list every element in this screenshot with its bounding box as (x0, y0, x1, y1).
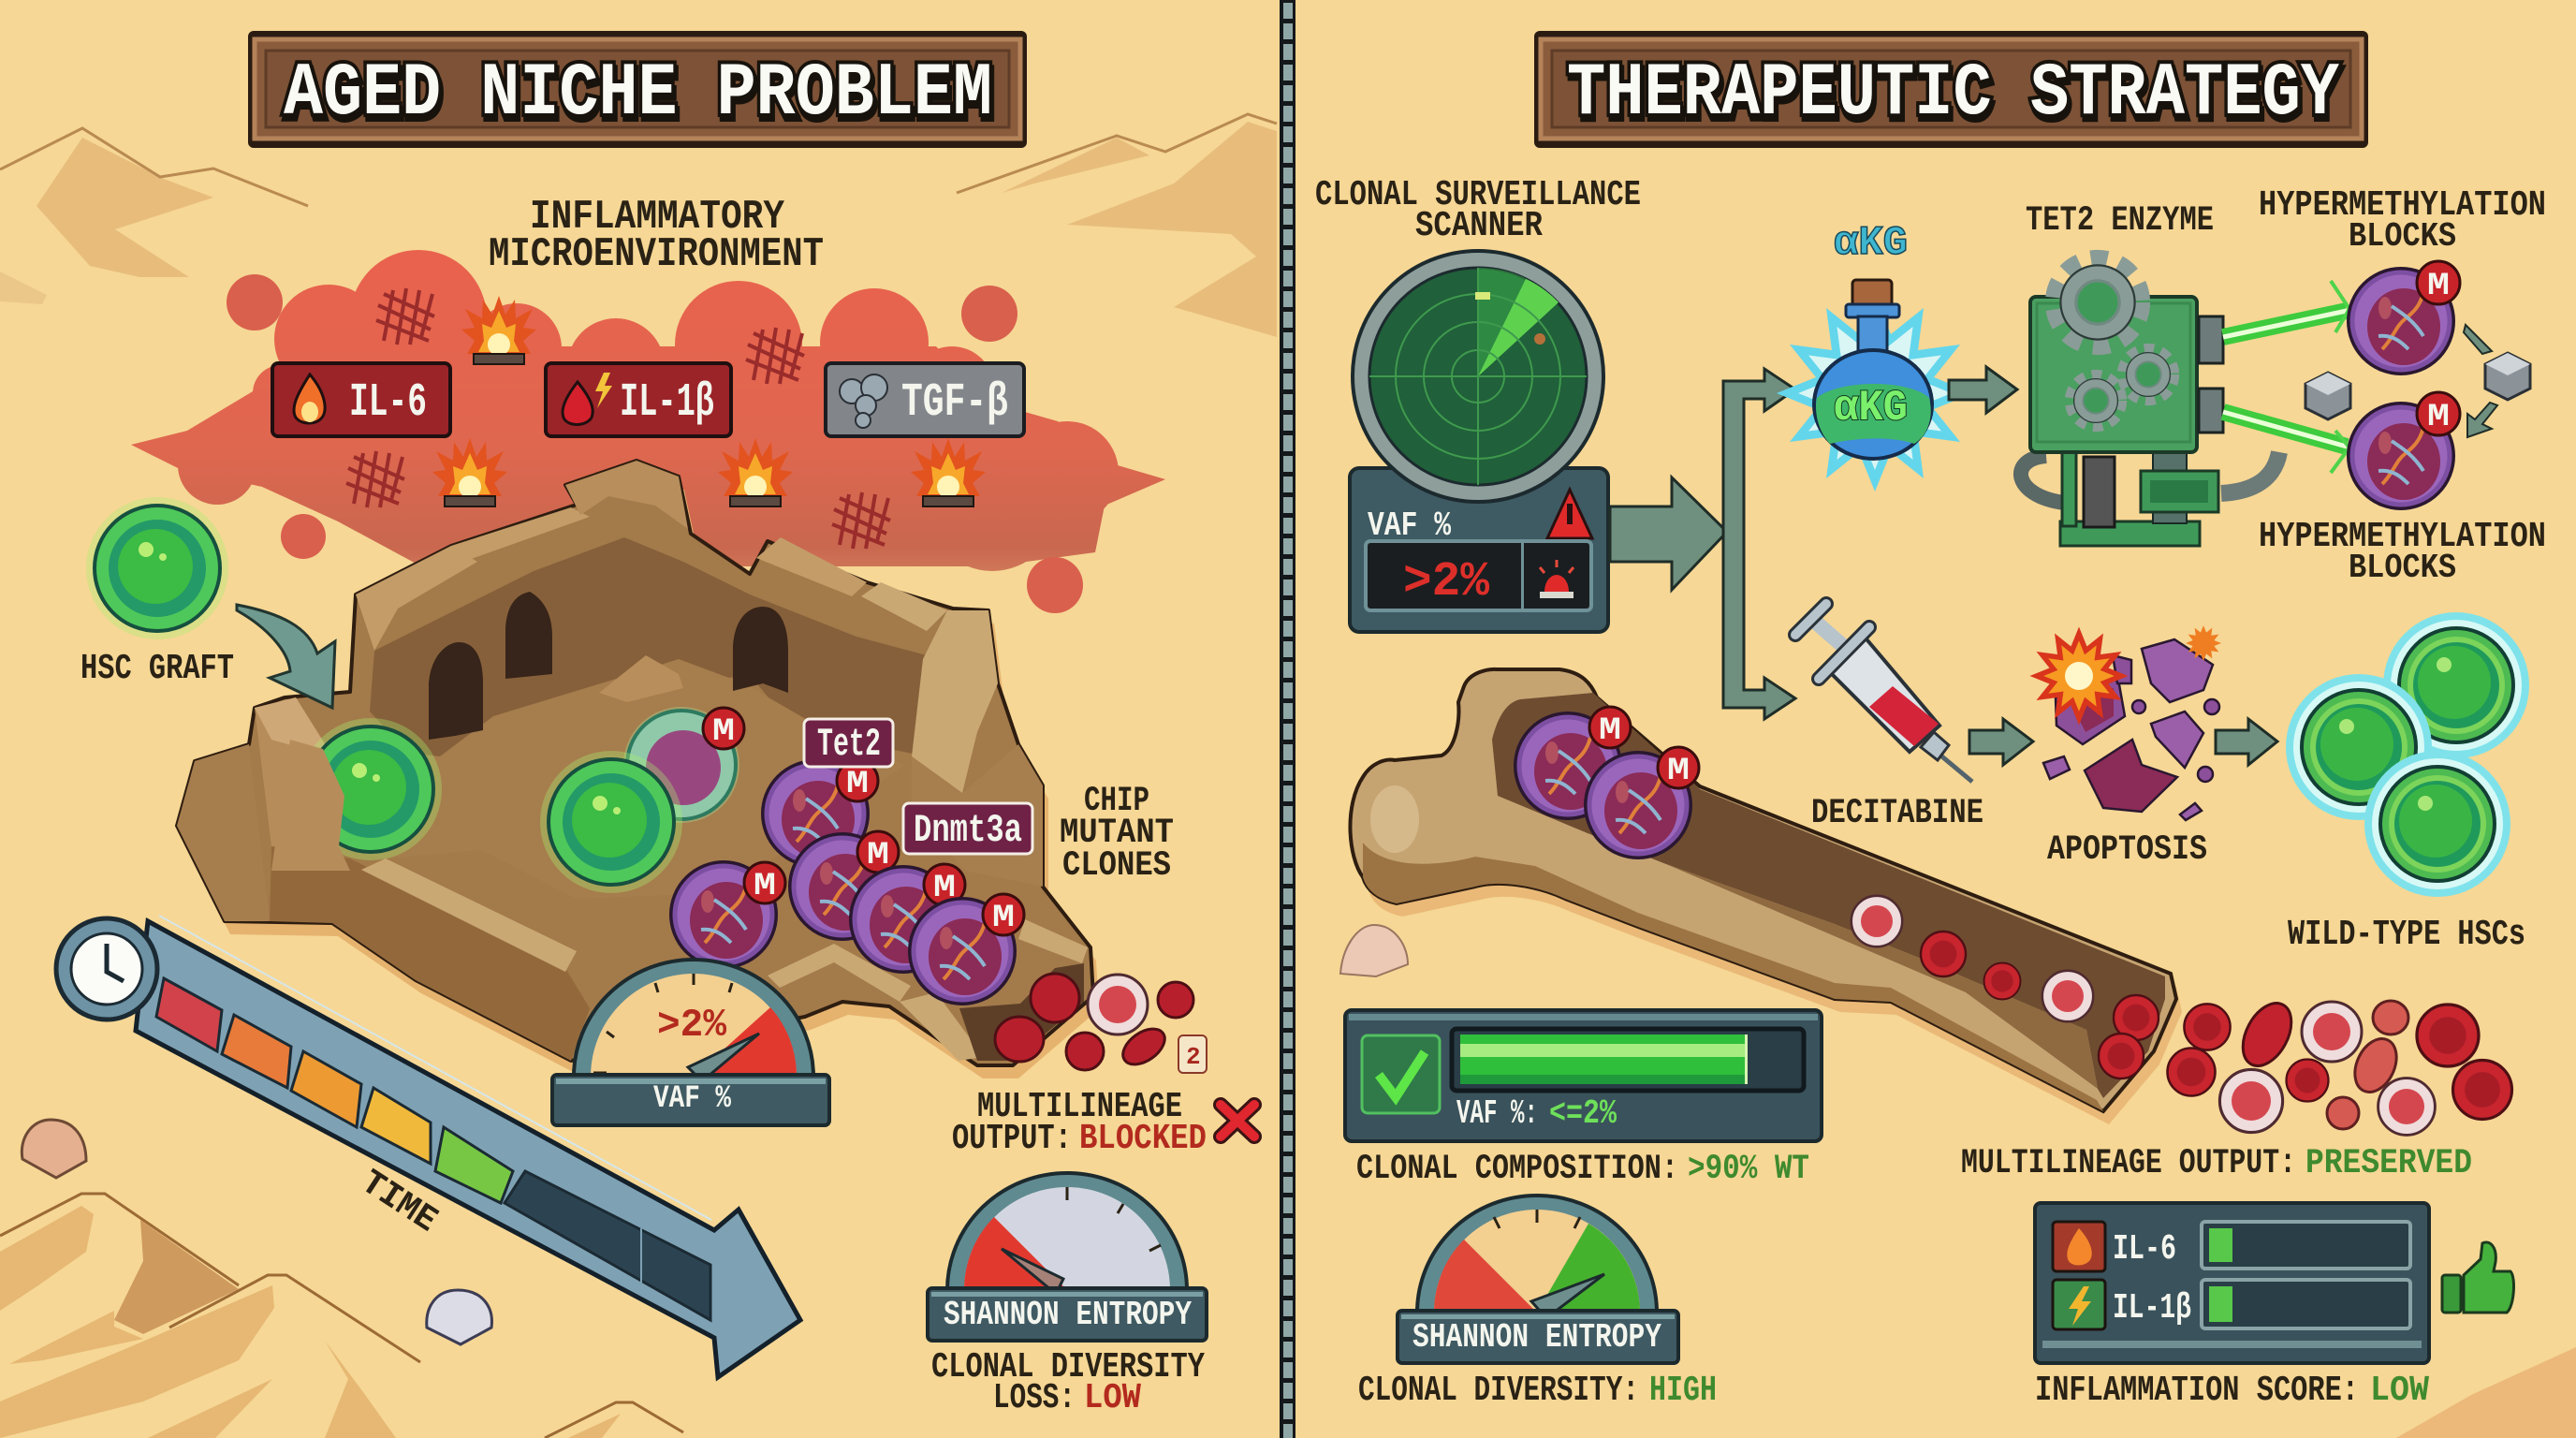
back wall (370, 537, 973, 777)
label: clonal diversity high: CLONAL DIVERSITY: (1358, 1371, 1639, 1411)
VAF gauge: elevated: VAF % (653, 1081, 731, 1117)
VAF readout panel (1350, 468, 1608, 632)
hypermethylated cells: M (2427, 400, 2450, 435)
label: multilineage output preserved: MULTILINEAGE OUTPUT: (1961, 1144, 2296, 1183)
tag: Dnmt3a: Dnmt3a (914, 808, 1022, 853)
label: multilineage output blocked (952, 1087, 1207, 1159)
label: clonal diversity loss low (931, 1347, 1205, 1418)
label: CHIP mutant clones: MUTANT (1060, 814, 1174, 853)
inflammation score panel (2035, 1203, 2429, 1363)
tag: Tet2 (804, 719, 893, 767)
time progression arrow (56, 916, 800, 1377)
label: clonal surveillance scanner: SCANNER (1415, 206, 1543, 246)
hypermethylated cells (2349, 261, 2460, 508)
mutant cells in marrow: M (1667, 754, 1690, 789)
label: clonal composition: CLONAL COMPOSITION: (1356, 1150, 1678, 1189)
shell (1340, 925, 1408, 976)
label: hypermethylation blocks lower: BLOCKS (2349, 549, 2456, 587)
label: multilineage output blocked: BLOCKED (1079, 1119, 1207, 1159)
radar scanner (1353, 251, 1603, 502)
VAF status bar panel: <=2% (1549, 1094, 1617, 1133)
label: CHIP mutant clones: CLONES (1062, 846, 1171, 886)
inflammation score panel: IL-1β (2113, 1288, 2191, 1328)
label: inflammation score low: INFLAMMATION SCORE: (2035, 1371, 2359, 1411)
CHIP mutant clones: M (992, 901, 1015, 936)
engrafted cell with mutation (623, 707, 744, 823)
Shannon entropy gauge: high (1398, 1196, 1678, 1363)
cytokine label: IL-1β: IL-1β (620, 376, 714, 430)
label: clonal surveillance scanner (1315, 175, 1641, 246)
label: CHIP mutant clones: CHIP (1084, 782, 1149, 821)
VAF status bar panel (1345, 1010, 1822, 1141)
arrow: apoptosis to wild-type cells (2216, 719, 2277, 765)
Shannon entropy gauge: low: SHANNON ENTROPY (944, 1296, 1192, 1334)
branching pipe arrows (1723, 369, 1795, 719)
label: clonal diversity high: HIGH (1649, 1371, 1717, 1411)
title banner: therapeutic strategy (1534, 31, 2368, 148)
bone marrow bone (1350, 669, 2182, 1124)
label: clonal diversity loss low: LOSS: (993, 1378, 1076, 1418)
icon: HSC graft cell (86, 497, 228, 639)
title banner: therapeutic strategy: THERAPEUTIC STRATEGY (1567, 51, 2339, 137)
label: clonal composition: >90% WT (1688, 1150, 1809, 1189)
center divider (1280, 0, 1295, 1438)
panel: aged niche problem (22, 31, 1254, 1418)
heading: inflammatory microenvironment: INFLAMMATORY (530, 194, 785, 241)
explosion (2029, 625, 2221, 725)
cytokine label: TGF-β (826, 363, 1024, 436)
preserved blood cell output (2168, 995, 2512, 1135)
Shannon entropy gauge: low (928, 1173, 1207, 1341)
label: clonal surveillance scanner: CLONAL SURVEILLANCE (1315, 175, 1641, 215)
CHIP mutant clones: M (754, 869, 776, 904)
label: clonal diversity loss low: LOW (1084, 1378, 1141, 1418)
label: multilineage output blocked: MULTILINEAGE (977, 1087, 1182, 1127)
inflammatory cloud (131, 250, 1165, 613)
tag: Tet2: Tet2 (817, 722, 881, 767)
icon: blocked cross (1221, 1105, 1254, 1137)
cytokine label: IL-1β (546, 363, 731, 436)
engrafted cell with mutation: M (712, 714, 735, 750)
blood cells in marrow (1852, 896, 2159, 1078)
heading: inflammatory microenvironment (489, 194, 824, 278)
label: multilineage output blocked: OUTPUT: (952, 1119, 1072, 1159)
TET2 enzyme machine (2021, 261, 2279, 546)
blocked blood cells (995, 974, 1207, 1073)
label: hypermethylation blocks lower (2259, 517, 2546, 587)
label: hypermethylation blocks upper: BLOCKS (2349, 217, 2456, 256)
CHIP mutant clones: M (867, 838, 889, 873)
front wall (270, 846, 590, 1061)
label: hypermethylation blocks upper (2259, 185, 2546, 256)
wild-type HSC cells (2286, 612, 2529, 897)
hypermethylated cells: M (2427, 269, 2450, 304)
VAF status bar panel: VAF %: (1456, 1094, 1538, 1133)
VAF gauge: elevated (552, 960, 829, 1125)
flask: alpha KG (1777, 280, 1973, 492)
panel: therapeutic strategy (1315, 31, 2546, 1411)
green lasers (2223, 281, 2349, 473)
title banner: aged niche problem: AGED NICHE PROBLEM (284, 51, 992, 137)
flask: alpha KG: αKG (1834, 384, 1908, 433)
graft cell in niche (271, 718, 442, 871)
icon: thumbs up (2442, 1242, 2513, 1313)
arrow: graft into niche (237, 605, 335, 708)
label: alpha KG: αKG (1834, 220, 1908, 267)
label: inflammation score low: LOW (2370, 1371, 2429, 1411)
label: time: TIME (353, 1163, 445, 1241)
cytokine label: IL-6 (272, 363, 450, 436)
title banner: aged niche problem (248, 31, 1027, 148)
label: TET2 enzyme: TET2 ENZYME (2026, 201, 2214, 241)
aged bone marrow niche (177, 461, 1099, 1078)
VAF readout panel: VAF % (1368, 506, 1451, 545)
label: clonal diversity loss low: CLONAL DIVERSITY (931, 1347, 1205, 1387)
syringe: decitabine (1795, 604, 1972, 782)
Shannon entropy gauge: high: SHANNON ENTROPY (1412, 1318, 1661, 1357)
cytokine label: IL-6: IL-6 (349, 376, 427, 430)
inflammation score panel: IL-6 (2113, 1229, 2176, 1269)
healthy stem cell (540, 751, 682, 893)
lower right arm (768, 944, 911, 1002)
arrow: decitabine to apoptosis (1969, 719, 2033, 765)
VAF gauge: elevated: >2% (657, 1003, 727, 1048)
niche floor (302, 659, 905, 899)
apoptosis fragments (2043, 639, 2219, 820)
arrow: flask to enzyme (1949, 367, 2017, 413)
VAF readout panel: >2% (1403, 554, 1490, 609)
arrow: scanner to branch (1610, 477, 1727, 590)
mutant cells in marrow (1515, 707, 1699, 858)
upper rim stones (356, 546, 477, 651)
cave arches (429, 642, 483, 740)
left boulder (177, 744, 270, 921)
CHIP mutant clones (671, 760, 1024, 1004)
label: HSC graft: HSC GRAFT (80, 649, 234, 689)
label: CHIP mutant clones (1060, 782, 1174, 886)
shell (427, 1290, 491, 1344)
methylation cubes and cycle arrows (2305, 325, 2530, 437)
heading: inflammatory microenvironment: MICROENVIRONMENT (489, 231, 824, 278)
mutant cells in marrow: M (1599, 713, 1621, 749)
label: multilineage output preserved: PRESERVED (2305, 1144, 2472, 1183)
cytokine label: TGF-β: TGF-β (901, 376, 1008, 430)
label: apoptosis: APOPTOSIS (2047, 830, 2207, 870)
CHIP mutant clones: M (846, 767, 869, 802)
label: decitabine: DECITABINE (1811, 794, 1983, 833)
blocked blood cells: 2 (1186, 1043, 1201, 1071)
heat and tissue damage markers (346, 288, 986, 549)
shell (22, 1120, 86, 1178)
CHIP mutant clones: M (933, 871, 956, 906)
